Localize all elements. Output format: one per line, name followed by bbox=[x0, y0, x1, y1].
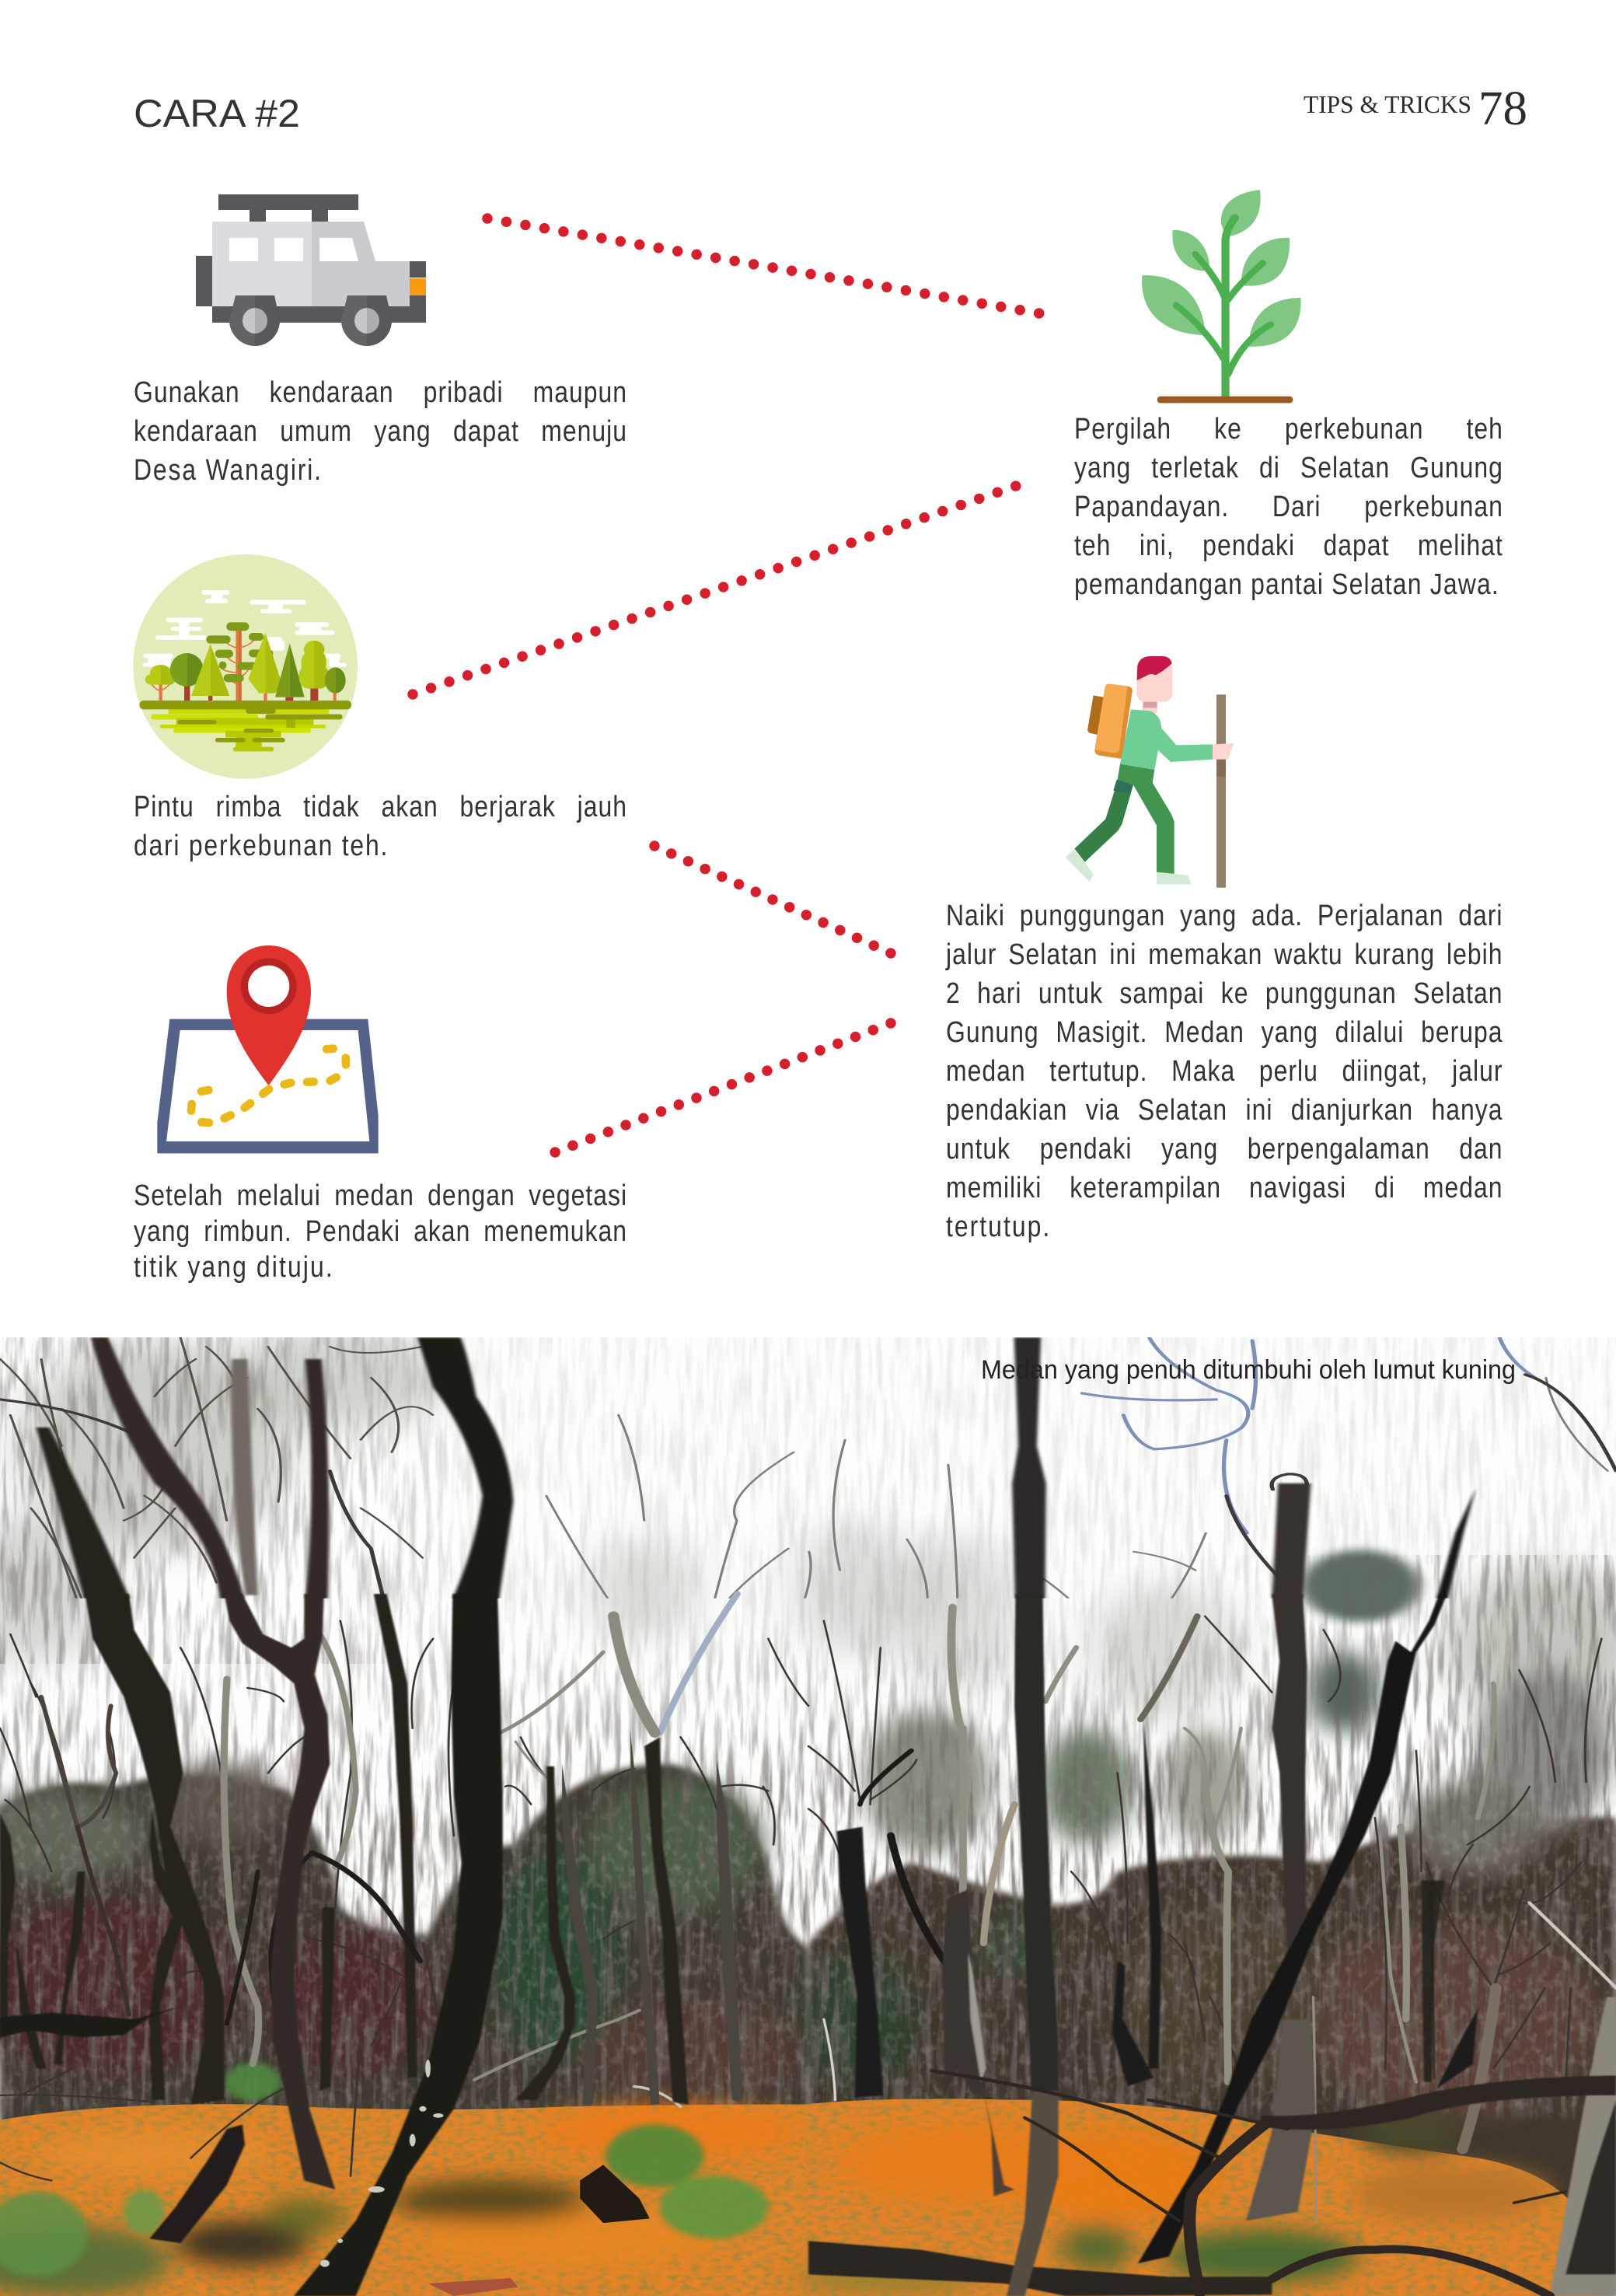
section label: TIPS & TRICKS bbox=[1304, 90, 1471, 118]
text: step 2: yang terletak di Selatan Gunung bbox=[1074, 452, 1503, 484]
text: step 5 bbox=[134, 1179, 627, 1284]
text: step 4: memiliki keterampilan navigasi di medan bbox=[946, 1172, 1503, 1204]
text: step 4: medan tertutup. Maka perlu diingat, jalur bbox=[946, 1055, 1503, 1088]
upper haze and crowns bbox=[0, 1328, 1616, 1725]
text: step 1: Desa Wanagiri. bbox=[134, 454, 323, 487]
text: step 4: 2 hari untuk sampai ke punggunan Selatan bbox=[946, 977, 1503, 1010]
moss ground bbox=[0, 2104, 815, 2296]
photo: burnt forest with orange moss bbox=[0, 1328, 1616, 2296]
text: step 1: kendaraan umum yang dapat menuju bbox=[134, 415, 627, 448]
text: step 4: untuk pendaki yang berpengalaman dan bbox=[946, 1133, 1503, 1165]
icon: jeep bbox=[196, 194, 426, 346]
page number: 78 bbox=[1478, 82, 1527, 135]
text: step 2 bbox=[1074, 413, 1503, 601]
icon: hiker bbox=[1066, 656, 1234, 888]
text: step 2: Pergilah ke perkebunan teh bbox=[1074, 413, 1503, 446]
icon: map with location pin bbox=[157, 945, 379, 1153]
icon: forest landscape bbox=[133, 554, 358, 779]
text: step 4: pendakian via Selatan ini dianjurkan hanya bbox=[946, 1094, 1503, 1127]
text: step 3: Pintu rimba tidak akan berjarak jauh bbox=[134, 791, 627, 823]
text: step 4: jalur Selatan ini memakan waktu kurang lebih bbox=[946, 938, 1503, 971]
text: step 5: titik yang dituju. bbox=[134, 1251, 334, 1284]
twig and foliage texture bbox=[0, 1337, 1616, 2119]
dotted connector 2 bbox=[413, 486, 1016, 694]
dotted connector 4 bbox=[555, 1023, 891, 1152]
text: step 5: yang rimbun. Pendaki akan menemukan bbox=[134, 1215, 627, 1248]
text: step 2: Papandayan. Dari perkebunan bbox=[1074, 491, 1503, 523]
text: step 4: Gunung Masigit. Medan yang dilalui berupa bbox=[946, 1016, 1503, 1049]
text: step 2: teh ini, pendaki dapat melihat bbox=[1074, 529, 1503, 562]
upper trunks and branches bbox=[0, 1337, 1616, 1599]
text: step 1 bbox=[134, 376, 627, 487]
lower right trees bbox=[808, 1594, 1616, 2296]
dotted connector 1 bbox=[487, 218, 1039, 313]
heading: CARA #2: CARA #2 bbox=[134, 92, 300, 135]
text: step 4: Naiki punggungan yang ada. Perjalanan dari bbox=[946, 900, 1503, 932]
background forest bbox=[0, 1764, 809, 2131]
text: step 1: Gunakan kendaraan pribadi maupun bbox=[134, 376, 627, 409]
text: step 3 bbox=[134, 791, 627, 862]
text: step 4: tertutup. bbox=[946, 1211, 1051, 1243]
text: step 5: Setelah melalui medan dengan vegetasi bbox=[134, 1179, 627, 1212]
trees bbox=[145, 622, 346, 701]
lower left trees bbox=[0, 1594, 808, 2296]
text: step 4 bbox=[945, 900, 1503, 1243]
ground and reflections bbox=[139, 701, 351, 751]
text: step 2: pemandangan pantai Selatan Jawa. bbox=[1074, 568, 1499, 601]
dotted connector 3 bbox=[654, 846, 891, 953]
ferns, rocks bbox=[0, 2064, 768, 2296]
photo caption: Medan yang penuh ditumbuhi oleh lumut kuning bbox=[981, 1355, 1516, 1385]
text: step 3: dari perkebunan teh. bbox=[134, 830, 389, 862]
icon: tea plant bbox=[1142, 190, 1301, 403]
